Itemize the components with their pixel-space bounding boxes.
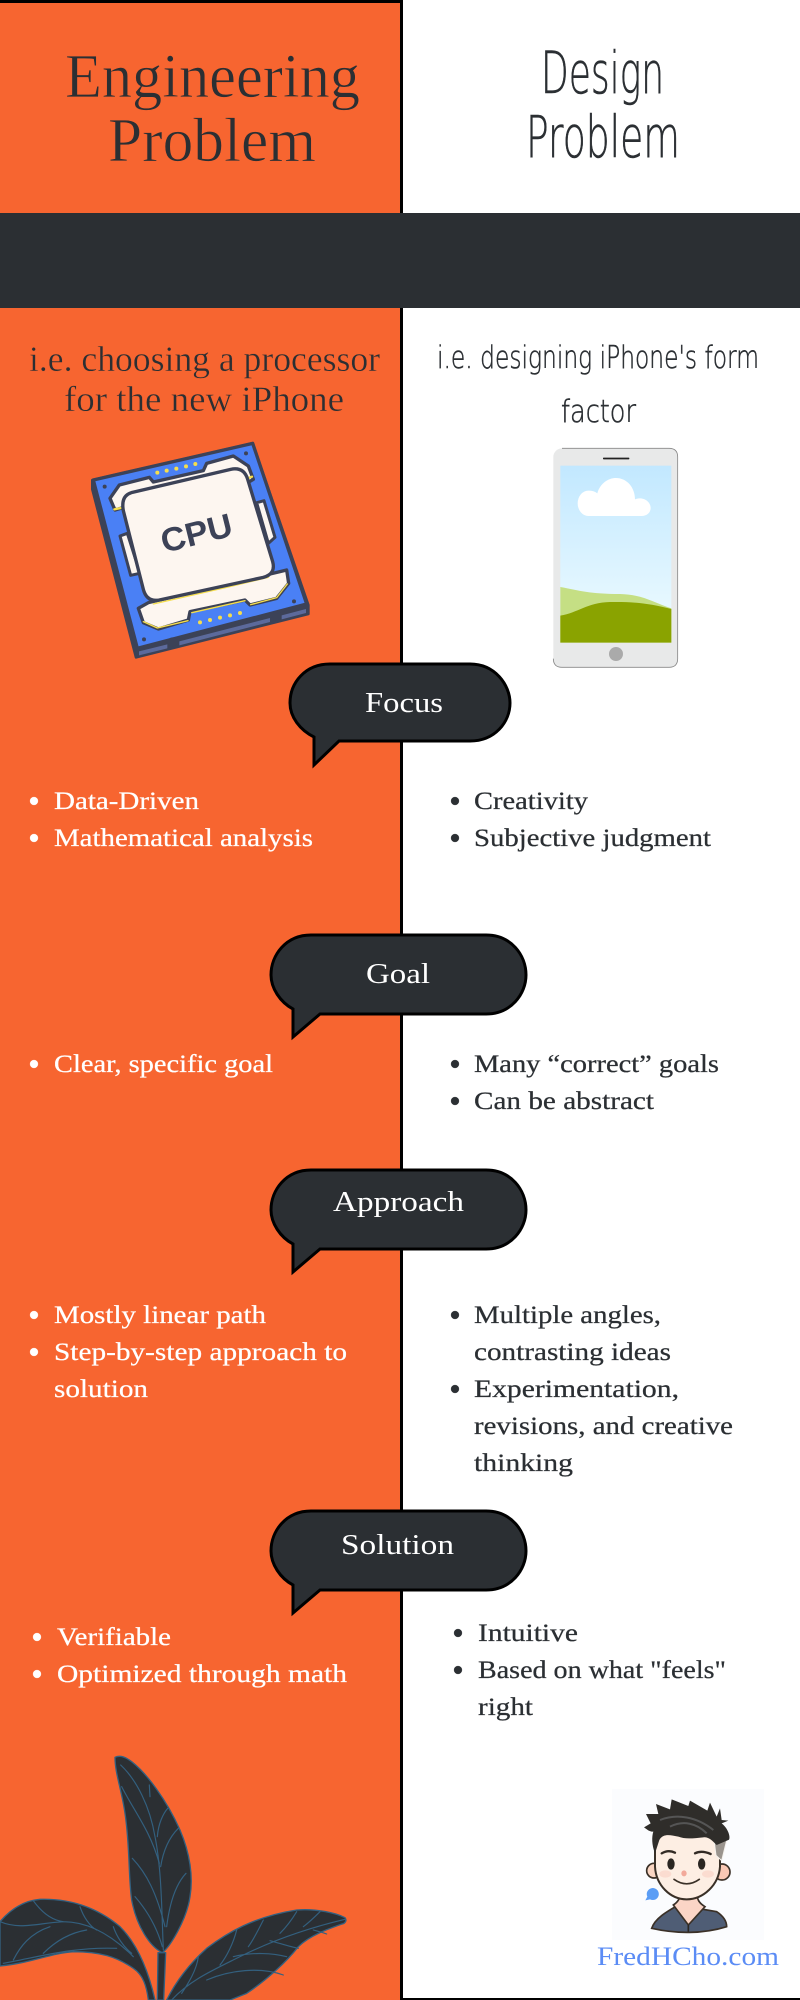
bottom edge line (403, 1998, 800, 2000)
illustration: leaves (0, 1756, 346, 2000)
header band (0, 213, 800, 308)
list: approach engineering: solution (54, 1376, 149, 1403)
list: focus engineering: Data-Driven (54, 788, 200, 815)
panel: engineering background (0, 0, 400, 2000)
list: solution design: right (478, 1694, 533, 1721)
list: focus design (451, 788, 711, 852)
list: solution design: Intuitive (478, 1620, 578, 1647)
list: solution design (454, 1620, 726, 1721)
list: approach design: revisions, and creative (474, 1413, 733, 1440)
list: solution design: Based on what "feels" (478, 1657, 726, 1684)
list: approach design: Experimentation, (474, 1376, 679, 1403)
list: focus design: Subjective judgment (474, 825, 711, 852)
list: approach design: thinking (474, 1450, 574, 1477)
bubble: Approach: Approach (333, 1186, 465, 1218)
icon: smartphone (553, 448, 678, 667)
subtitle: engineering example: for the new iPhone (64, 379, 344, 419)
list: approach design (451, 1302, 733, 1477)
title: Engineering Problem: Problem (108, 107, 316, 175)
CPU label: CPU (157, 507, 236, 561)
list: goal design: Many “correct” goals (474, 1051, 719, 1078)
title: Engineering Problem: Engineering (65, 43, 360, 111)
title: Design Problem: Design (541, 39, 664, 107)
list: approach design: contrasting ideas (474, 1339, 671, 1366)
list: focus engineering: Mathematical analysis (54, 825, 313, 852)
subtitle: design example: factor (561, 394, 636, 430)
list: approach engineering: Mostly linear path (54, 1302, 267, 1329)
list: focus engineering (30, 788, 313, 852)
list: approach design: Multiple angles, (474, 1302, 661, 1329)
list: approach engineering: Step-by-step approach to (54, 1339, 347, 1366)
subtitle: design example (437, 340, 759, 430)
title: Design Problem: Problem (526, 103, 680, 171)
subtitle: engineering example: i.e. choosing a processor (29, 339, 380, 379)
title: Engineering Problem (65, 43, 360, 175)
bubble: Goal (271, 935, 526, 1037)
center divider (400, 0, 403, 2000)
list: approach engineering (30, 1302, 347, 1403)
list: goal design: Can be abstract (474, 1088, 654, 1115)
list: solution engineering (33, 1624, 348, 1688)
list: solution engineering: Optimized through math (57, 1661, 348, 1688)
bubble: Goal: Goal (366, 958, 430, 990)
subtitle: engineering example (29, 339, 380, 419)
brand: FredHCho.com: FredHCho.com (597, 1942, 779, 1971)
bubble: Focus (290, 664, 510, 765)
bubble: Solution (271, 1511, 526, 1613)
list: goal engineering: Clear, specific goal (54, 1051, 273, 1078)
list: goal design (451, 1051, 719, 1115)
icon: CPU chip (92, 443, 308, 657)
title: Design Problem (526, 39, 680, 171)
list: focus design: Creativity (474, 788, 589, 815)
bubble: Focus: Focus (365, 687, 443, 719)
bubble: Approach (271, 1170, 526, 1272)
panel: design background (403, 0, 800, 2000)
bubble: Solution: Solution (341, 1529, 455, 1561)
top edge line (0, 0, 403, 3)
avatar: FredHCho portrait (612, 1789, 764, 1940)
list: solution engineering: Verifiable (57, 1624, 171, 1651)
